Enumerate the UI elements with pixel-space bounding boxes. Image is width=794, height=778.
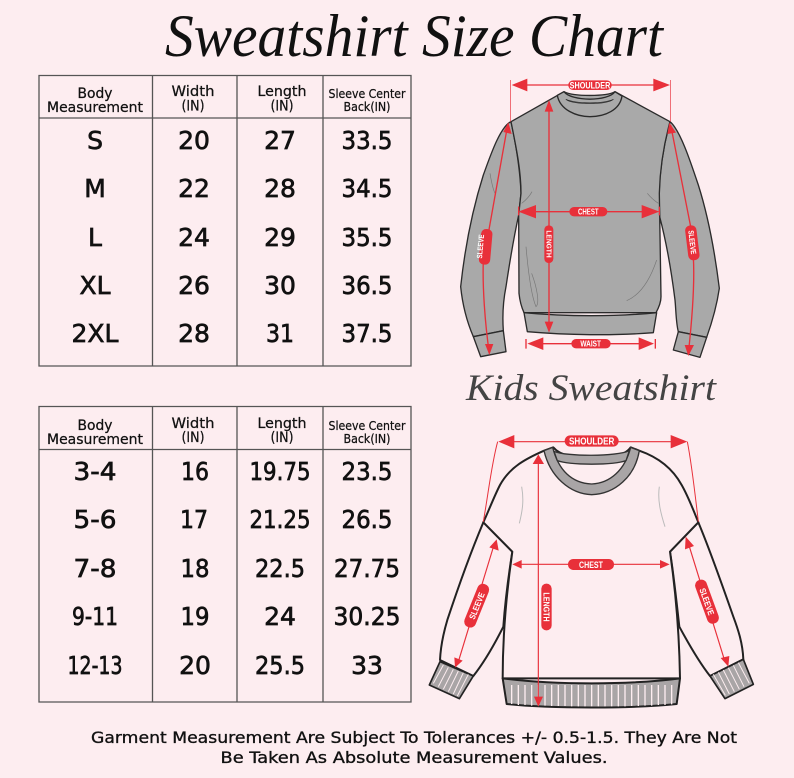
row S: 33.5 bbox=[342, 126, 392, 155]
torso bbox=[511, 92, 670, 313]
row 3-4 bbox=[74, 457, 392, 486]
row 9-11: 9-11 bbox=[72, 602, 118, 631]
row XL: 30 bbox=[264, 271, 296, 300]
row M: M bbox=[84, 174, 106, 203]
table header: adult: Back(IN) bbox=[344, 100, 390, 114]
table: kids sizes bbox=[39, 406, 411, 702]
measurement labels: SHOULDER bbox=[570, 80, 611, 90]
row XL: 36.5 bbox=[342, 271, 392, 300]
row L bbox=[88, 223, 392, 252]
row 5-6: 26.5 bbox=[342, 505, 392, 534]
right sleeve bbox=[659, 122, 719, 337]
row 9-11: 24 bbox=[264, 602, 296, 631]
table header: kids: Body bbox=[78, 418, 112, 434]
row 7-8: 27.75 bbox=[334, 554, 400, 583]
row 2XL: 31 bbox=[266, 319, 294, 348]
measurement labels: SLEEVE bbox=[467, 591, 487, 621]
hem rib bbox=[503, 678, 680, 707]
measurement labels: SLEEVE bbox=[686, 230, 698, 255]
subtitle: kids sweatshirt: Kids Sweatshirt bbox=[465, 368, 718, 409]
row 7-8: 18 bbox=[180, 554, 210, 583]
arrowheads bbox=[454, 435, 729, 707]
table header: kids: Back(IN) bbox=[344, 432, 390, 446]
row 5-6: 17 bbox=[180, 505, 208, 534]
row L: 29 bbox=[264, 223, 296, 252]
row 5-6: 5-6 bbox=[74, 505, 116, 534]
table header: kids bbox=[47, 416, 406, 448]
row L: L bbox=[88, 223, 102, 252]
measurement labels: LENGTH bbox=[541, 592, 551, 622]
row S: 20 bbox=[178, 126, 210, 155]
diagram: kids outline sweatshirt bbox=[429, 435, 753, 707]
row 5-6 bbox=[74, 505, 392, 534]
row XL bbox=[80, 271, 392, 300]
measurement labels: CHEST bbox=[578, 207, 599, 217]
table header: kids: Length bbox=[258, 416, 306, 432]
row M bbox=[84, 174, 392, 203]
table header: kids: Measurement bbox=[47, 432, 143, 448]
row 2XL: 28 bbox=[178, 319, 210, 348]
row 9-11 bbox=[72, 602, 400, 631]
table header: adult bbox=[47, 84, 406, 116]
table header: adult: (IN) bbox=[270, 98, 294, 114]
row 7-8 bbox=[74, 554, 400, 583]
measurement labels: SLEEVE bbox=[697, 587, 716, 617]
left cuff bbox=[429, 662, 473, 699]
row XL: 26 bbox=[178, 271, 210, 300]
row XL: XL bbox=[80, 271, 111, 300]
row M: 34.5 bbox=[342, 174, 392, 203]
row 5-6: 21.25 bbox=[250, 505, 310, 534]
row S bbox=[87, 126, 392, 155]
left cuff bbox=[473, 331, 506, 357]
table header: kids: (IN) bbox=[182, 430, 204, 446]
left sleeve bbox=[440, 522, 512, 676]
row S: S bbox=[87, 126, 103, 155]
measurement labels bbox=[475, 80, 698, 348]
table header: adult: (IN) bbox=[182, 98, 204, 114]
diagram: adult grey sweatshirt bbox=[461, 79, 719, 357]
measurement labels: LENGTH bbox=[544, 230, 553, 258]
row 9-11: 19 bbox=[180, 602, 210, 631]
row M: 28 bbox=[264, 174, 296, 203]
fold lines bbox=[519, 487, 665, 527]
table header: adult: Measurement bbox=[47, 100, 143, 116]
row 9-11: 30.25 bbox=[334, 602, 400, 631]
measurement labels: CHEST bbox=[579, 560, 603, 570]
row 7-8: 22.5 bbox=[255, 554, 305, 583]
row 3-4: 16 bbox=[181, 457, 209, 486]
row 12-13 bbox=[68, 651, 383, 680]
table header: adult: Length bbox=[258, 84, 306, 100]
footer note bbox=[91, 728, 737, 767]
right cuff bbox=[710, 659, 753, 699]
row L: 35.5 bbox=[342, 223, 392, 252]
row 2XL bbox=[72, 319, 392, 348]
table header: adult: Sleeve Center bbox=[328, 87, 406, 101]
fold lines bbox=[490, 173, 658, 307]
row 12-13: 25.5 bbox=[255, 651, 305, 680]
hem rib bbox=[524, 313, 657, 335]
row 12-13: 12-13 bbox=[68, 651, 122, 680]
row 12-13: 20 bbox=[179, 651, 211, 680]
guide lines bbox=[483, 442, 698, 522]
table header: adult: Body bbox=[78, 86, 112, 102]
table header: kids: (IN) bbox=[270, 430, 294, 446]
table header: adult: Width bbox=[172, 84, 214, 100]
measurement labels bbox=[467, 437, 716, 622]
arrowheads bbox=[485, 79, 694, 356]
row 2XL: 37.5 bbox=[342, 319, 392, 348]
row 2XL: 2XL bbox=[72, 319, 119, 348]
label pills bbox=[565, 435, 619, 447]
row 7-8: 7-8 bbox=[74, 554, 116, 583]
table: adult sizes bbox=[39, 76, 411, 366]
row 3-4: 19.75 bbox=[250, 457, 310, 486]
measurement labels: SLEEVE bbox=[475, 234, 486, 259]
torso bbox=[483, 447, 698, 678]
row S: 27 bbox=[264, 126, 296, 155]
right sleeve bbox=[670, 522, 743, 676]
measurement labels: SHOULDER bbox=[569, 437, 614, 448]
footer note: Garment Measurement Are Subject To Tolerances +/- 0.5-1.5. They Are Not bbox=[91, 728, 737, 747]
row 3-4: 3-4 bbox=[74, 457, 116, 486]
right cuff bbox=[673, 332, 707, 357]
collar bbox=[557, 92, 622, 117]
left sleeve bbox=[461, 122, 521, 337]
footer note: Be Taken As Absolute Measurement Values. bbox=[220, 748, 608, 767]
table header: kids: Width bbox=[172, 416, 214, 432]
guide lines bbox=[511, 80, 670, 122]
row L: 24 bbox=[178, 223, 210, 252]
row M: 22 bbox=[178, 174, 210, 203]
label pills bbox=[568, 80, 612, 90]
title: Sweatshirt Size Chart bbox=[165, 3, 664, 69]
measurement labels: WAIST bbox=[580, 339, 601, 348]
row 3-4: 23.5 bbox=[342, 457, 392, 486]
collar bbox=[544, 447, 639, 495]
table header: kids: Sleeve Center bbox=[328, 419, 406, 433]
row 12-13: 33 bbox=[351, 651, 383, 680]
